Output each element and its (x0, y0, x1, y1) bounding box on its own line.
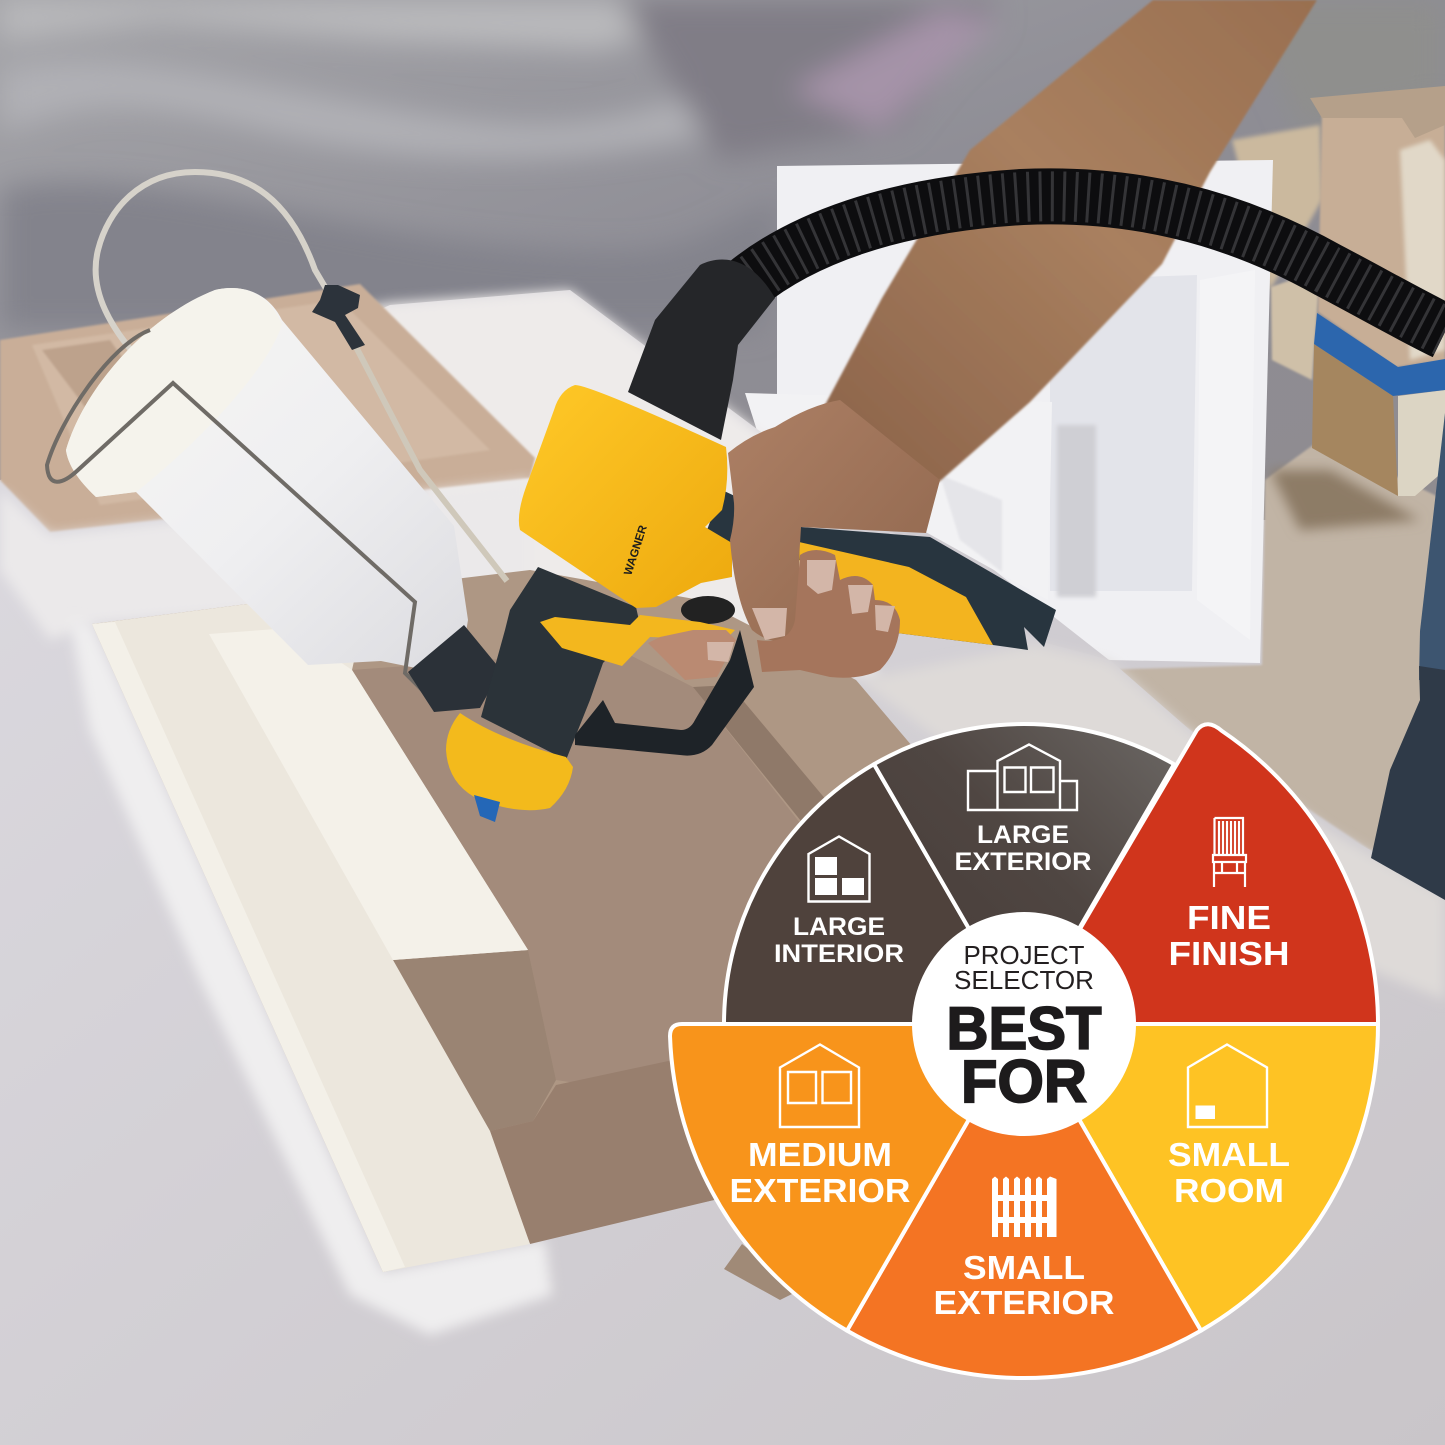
label: large exterior: LARGE (977, 821, 1069, 849)
drop cloth table (0, 290, 1445, 1445)
trigger (540, 615, 735, 666)
project selector wheel (670, 724, 1378, 1378)
icon: fence (992, 1176, 1056, 1237)
label: large interior: LARGE (793, 913, 885, 941)
text: best for: BEST (946, 995, 1102, 1062)
label: small room: SMALL (1168, 1136, 1290, 1173)
painted cream area (92, 590, 530, 1272)
nozzle ring (446, 713, 573, 810)
hand (648, 400, 940, 680)
bottle body (66, 288, 468, 669)
lower rail (490, 1060, 714, 1244)
bottle collar (408, 625, 501, 712)
knob (681, 596, 735, 624)
black rubber sleeve (628, 260, 775, 440)
segment: large interior (724, 764, 1024, 1024)
wire rack (47, 330, 434, 702)
person's arm (817, 0, 1317, 482)
segment: small exterior: EXTERIOR (934, 1284, 1115, 1321)
floor stains (1270, 470, 1420, 530)
plastic sheet backdrop (0, 0, 1445, 520)
lower tube (355, 345, 507, 581)
flat panel (352, 650, 1000, 1100)
white cloth highlight (300, 290, 880, 680)
lower fingers (757, 550, 900, 678)
blue tip (474, 795, 500, 822)
icon: chair (1213, 818, 1246, 887)
trigger guard (575, 630, 754, 756)
segment: large exterior (874, 724, 1174, 1024)
white cloth left (0, 480, 530, 640)
segment: small exterior (847, 1024, 1201, 1378)
gun barrel (481, 567, 640, 760)
text: project selector: PROJECT (964, 940, 1085, 970)
label: medium exterior: MEDIUM (748, 1136, 892, 1173)
segment: medium exterior: EXTERIOR (730, 1172, 911, 1209)
segment: large interior: INTERIOR (774, 940, 904, 968)
icon: large house (968, 744, 1077, 810)
label: fine finish: FINE (1187, 899, 1271, 936)
trousers (1371, 413, 1445, 900)
cardboard boxes (1232, 86, 1445, 496)
icon: small house (1188, 1044, 1267, 1127)
segment: medium exterior (670, 1024, 1024, 1331)
frame ridge (693, 685, 960, 975)
paint bottle with tube and wire rack (47, 172, 507, 712)
palm and index finger (728, 400, 940, 641)
cloth right highlight (860, 645, 1445, 1000)
segment: fine finish (1024, 724, 1378, 1024)
brand mark: WAGNER (622, 523, 650, 577)
corrugated hose (745, 196, 1445, 332)
segment: large exterior: EXTERIOR (954, 848, 1092, 876)
centre badge: FOR (961, 1048, 1087, 1115)
segment: small room: ROOM (1174, 1172, 1284, 1209)
icon: house with boxes (808, 836, 870, 902)
label: small exterior: SMALL (963, 1249, 1085, 1286)
segment: fine finish: FINISH (1168, 935, 1290, 972)
handle rear grip (707, 490, 1056, 650)
tube (96, 172, 328, 370)
finger nails (707, 560, 895, 662)
recess bevel (393, 950, 556, 1131)
centre badge (912, 912, 1136, 1136)
segment: small room (1024, 1024, 1378, 1331)
paint overspray on cloth (70, 620, 552, 1335)
white cabinet doors (745, 160, 1273, 663)
door being painted (92, 570, 1060, 1272)
recess highlight (209, 628, 528, 960)
yellow turbine housing (519, 385, 732, 608)
icon: medium house (780, 1044, 859, 1127)
brown door at back (0, 284, 535, 532)
centre badge: SELECTOR (954, 965, 1094, 995)
spray gun (446, 260, 1056, 822)
floor (1100, 440, 1445, 860)
door base (92, 570, 1060, 1272)
scrap under wheel (724, 1244, 800, 1300)
thumb (648, 630, 736, 680)
tube connector (312, 285, 365, 350)
bottle lid (66, 288, 282, 497)
handle yellow inlay (799, 542, 993, 645)
frame edge strip (92, 622, 405, 1272)
